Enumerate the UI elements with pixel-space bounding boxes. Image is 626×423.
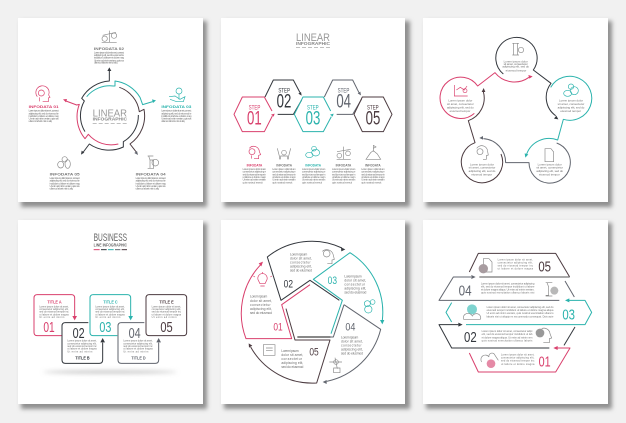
info column 2 (272, 148, 296, 185)
info column 1: Ut enim ad minim veniam (243, 179, 266, 182)
circle 4 dark: adipiscing elit, sed do (469, 169, 496, 173)
box 01: ut labore et dolore magna (39, 313, 69, 316)
box 01: 01 (43, 320, 55, 336)
title (296, 32, 331, 48)
icon: hand with coin (169, 88, 185, 102)
info column 1: Lorem ipsum dolor sit am (243, 168, 266, 171)
label: infodata 04: incididunt ut labore et dolore mag (136, 182, 166, 185)
circle 5 red: Lorem ipsum dolor (448, 99, 472, 103)
band 04: et dolore magna aliqua. Ut enim ad minim veniam, (481, 288, 535, 291)
circle 4 dark (461, 88, 503, 183)
band 04: quis nostrud exercitation ullamco laboris nisi (481, 291, 535, 294)
box 02: Lorem ipsum dolor sit amet, (67, 340, 97, 343)
label: infodata 02: INFODATA 02 (94, 46, 125, 51)
box 05: ut labore et dolore magna (152, 313, 182, 316)
box 05: 05 (160, 320, 173, 336)
segment 04: Lorem ipsum (341, 336, 359, 340)
circle 3 gray: adipiscing elit, sed do (536, 169, 563, 173)
segment 04: 04 (345, 322, 355, 334)
info column 3: quis nostrud exercit (302, 182, 322, 185)
hexagon 01: STEP (249, 106, 260, 112)
label: infodata 01: Lorem ipsum dolor sit amet, consect (29, 110, 59, 113)
segment 03: sed do eiusmod (344, 291, 366, 295)
info column 5: ut labore et dolore magn (361, 176, 385, 179)
box 01: Lorem ipsum dolor sit amet, (39, 305, 69, 308)
circle 2 teal: adipiscing elit, sed do (558, 105, 585, 109)
label: infodata 05: incididunt ut labore et dolore mag (50, 182, 80, 185)
hexagon 01 (234, 97, 275, 132)
circle 4 dark: eiusmod tempor (471, 172, 492, 176)
label: infodata 02: ullamco laboris nisi ut aliq (94, 62, 118, 65)
hexagon 03 (294, 97, 334, 132)
info column 4: ut labore et dolore magn (332, 176, 356, 179)
band 03: laboris nisi ut aliquip ex ea commodo consequat. Duis aute (487, 315, 554, 318)
centre title (93, 109, 128, 124)
box 01: consectetur adipiscing elit, (39, 308, 69, 311)
hexagon 05 (354, 97, 392, 132)
label: infodata 04: Ut enim ad minim veniam, quis nos (136, 185, 166, 188)
box 04: sed do eiusmod tempor inc (123, 345, 153, 348)
band 04: Lorem ipsum dolor sit amet, consectetur adipiscing (481, 282, 535, 285)
circle 2 teal: sit amet, consectetur (558, 102, 584, 106)
info column 3: sed do eiusmod tempor in (302, 173, 326, 176)
label: infodata 03: INFODATA 03 (161, 104, 192, 109)
band 05: 05 (538, 259, 551, 275)
circle 5 red: eiusmod tempor (450, 109, 470, 113)
hexagon 02 (265, 80, 302, 114)
label: infodata 02: adipiscing elit, sed do eiusmod te (94, 54, 125, 57)
box 03: consectetur adipiscing elit, (95, 308, 125, 311)
segment 05: dolor sit amet, (281, 353, 303, 357)
box 03: Lorem ipsum dolor sit amet, (95, 305, 125, 308)
circle 1 black: adipiscing elit, sed do (502, 65, 529, 69)
segment 05: 05 (309, 347, 319, 359)
band 01: sed do eiusmod tempor inc (501, 360, 535, 363)
circle 5 red (440, 73, 533, 118)
info column 4: sed do eiusmod tempor in (332, 173, 356, 176)
band 04: elit, sed do eiusmod tempor incididunt ut labore (481, 285, 535, 288)
info column 5: quis nostrud exercit (361, 182, 382, 185)
panel: hexagon steps (221, 18, 410, 207)
box 02 (62, 323, 105, 363)
circle 5 red: adipiscing elit, sed do (447, 105, 474, 109)
title: LINEAR (296, 32, 330, 44)
hexagon 03: 03 (306, 109, 320, 130)
label: infodata 02: incididunt ut labore et dolore mag (94, 57, 125, 60)
segment 01: Lorem ipsum (250, 295, 268, 299)
circle 2 teal: Lorem ipsum dolor (559, 99, 583, 103)
circle 2 teal (525, 76, 592, 158)
segment 03: consectetur (344, 283, 366, 287)
band 02: 02 (464, 330, 477, 346)
circular arrows (63, 67, 156, 155)
band 03: 03 (562, 307, 575, 323)
label: infodata 03: Lorem ipsum dolor sit amet, consect (161, 110, 192, 113)
label: infodata 01: incididunt ut labore et dolore mag (29, 115, 59, 118)
label: infodata 03: Ut enim ad minim veniam, quis nos (161, 118, 192, 121)
info column 3 (302, 146, 326, 185)
info column 2: sed do eiusmod tempor in (272, 173, 296, 176)
label: infodata 01: Ut enim ad minim veniam, quis nos (29, 118, 59, 121)
box 03 (90, 295, 133, 336)
box 03: Ut enim ad minim (95, 316, 120, 319)
band 05: consectetur adipiscing elit, (498, 262, 533, 265)
panel: pentagon pie (221, 220, 410, 409)
label: infodata 03: adipiscing elit, sed do eiusmod te (161, 112, 192, 115)
label: infodata 05: INFODATA 05 (50, 172, 81, 177)
box 02: consectetur adipiscing elit, (67, 342, 97, 345)
segment 04: adipiscing elit, (341, 348, 363, 352)
segment 03 (313, 253, 384, 334)
band 02: et dolore magna aliqua. Ut enim ad minim ven (482, 336, 533, 339)
info column 2: consectetur adipiscing e (272, 171, 296, 174)
label: infodata 05: Ut enim ad minim veniam, quis nos (50, 185, 80, 188)
info column 2: quis nostrud exercit (272, 182, 293, 185)
icon: bottle and cup (148, 156, 159, 168)
info column 5: Ut enim ad minim veniam (361, 179, 385, 182)
segment 01: adipiscing elit, (250, 307, 272, 311)
band 01: Lorem ipsum dolor sit amet, (501, 354, 535, 357)
info column 5: consectetur adipiscing e (361, 171, 385, 174)
box 02: 02 (73, 326, 85, 342)
info column 2: ut labore et dolore magn (272, 176, 296, 179)
box 04: consectetur adipiscing elit, (123, 342, 153, 345)
box 04 (118, 323, 161, 363)
label: infodata 05: adipiscing elit, sed do eiusmod te (50, 180, 80, 183)
segment 04: sed do eiusmod (341, 352, 363, 356)
hexagon 03: STEP (307, 106, 319, 112)
label: infodata 04: INFODATA 04 (136, 172, 167, 177)
box 05 (146, 295, 187, 336)
band 05 (469, 253, 570, 277)
box 05: sed do eiusmod tempor inc (152, 311, 182, 314)
centre title: LINEAR (93, 109, 127, 120)
segment 02: consectetur (290, 261, 312, 265)
segment 04 (297, 305, 381, 384)
segment 02 (267, 241, 345, 300)
band 03: eiusmod tempor incididunt ut labore et dolore magna aliqua (487, 309, 554, 312)
segment 04: dolor sit amet, (341, 340, 363, 344)
box 04: 04 (129, 326, 141, 342)
drop shadow (43, 370, 177, 374)
segment 05 (249, 309, 330, 383)
segment 03: adipiscing elit, (344, 287, 366, 291)
band 04: 04 (459, 283, 472, 299)
segment 03: dolor sit amet, (344, 279, 366, 283)
info column 4: consectetur adipiscing e (332, 171, 356, 174)
title: INFOGRAPHIC (296, 41, 331, 46)
segment 05: consectetur (281, 357, 303, 361)
label: infodata 05 (50, 172, 81, 190)
info column 3: Ut enim ad minim veniam (302, 179, 325, 182)
box 03: TITLE C (103, 299, 118, 305)
box 01: sed do eiusmod tempor inc (39, 311, 69, 314)
segment 01: 01 (273, 321, 283, 333)
circle 5 red: sit amet, consectetur (447, 102, 474, 106)
label: infodata 01 (29, 104, 60, 123)
info column 3: ut labore et dolore magn (302, 176, 326, 179)
segment 02: Lorem ipsum (290, 252, 308, 256)
band 03 (446, 298, 592, 325)
segment 02: adipiscing elit, (290, 265, 312, 269)
icon: figure with clouds (58, 157, 70, 168)
band 02: elit, sed do eiusmod tempor incididunt ut lab (482, 333, 533, 336)
info column 4: Ut enim ad minim veniam (332, 179, 355, 182)
segment 01 (241, 262, 310, 339)
info column 5: sed do eiusmod tempor in (361, 173, 385, 176)
circle 1 black (496, 37, 558, 119)
hexagon 04 (324, 80, 362, 114)
band 05: sed do eiusmod tempor inc (498, 265, 534, 268)
info column 2: INFODATA (276, 163, 292, 167)
label: infodata 04: ullamco laboris nisi ut aliq (136, 187, 160, 190)
box 01: Ut enim ad minim (39, 316, 64, 319)
band 01: consectetur adipiscing elit, (501, 357, 535, 360)
info column 3: Lorem ipsum dolor sit am (302, 168, 325, 171)
segment 05: adipiscing elit, (281, 361, 303, 365)
box 04: Ut enim ad minim (123, 350, 148, 353)
title: BUSINESS (94, 232, 127, 244)
label: infodata 04: adipiscing elit, sed do eiusmod te (136, 180, 166, 183)
label: infodata 01: INFODATA 01 (29, 104, 60, 109)
info column 1 (243, 146, 267, 185)
info column 4 (332, 147, 356, 185)
info column 3: INFODATA (305, 163, 321, 167)
box 03: ut labore et dolore magna (95, 313, 125, 316)
segment 02: 02 (284, 278, 293, 290)
title: LINE INFOGRAPHIC (94, 243, 127, 248)
label: infodata 02 (94, 46, 125, 65)
box 05: Lorem ipsum dolor sit amet, (152, 305, 181, 308)
info column 1: ut labore et dolore magn (243, 176, 267, 179)
label: infodata 05: Lorem ipsum dolor sit amet, consect (50, 177, 80, 180)
band 05: Lorem ipsum dolor sit amet, (498, 259, 533, 262)
label: infodata 02: Lorem ipsum dolor sit amet, consect (94, 51, 124, 54)
box 02: ut labore et dolore magna (67, 348, 97, 351)
segment 03: Lorem ipsum (344, 275, 362, 279)
title (94, 232, 127, 250)
box 02: sed do eiusmod tempor inc (67, 345, 97, 348)
circle 3 gray: Lorem ipsum dolor (538, 162, 562, 166)
info column 4: INFODATA (336, 163, 352, 167)
box 02: Ut enim ad minim (67, 350, 92, 353)
label: infodata 01: adipiscing elit, sed do eiusmod te (29, 112, 59, 115)
info column 1: quis nostrud exercit (243, 182, 263, 185)
band 05: ut labore et dolore magna (498, 268, 534, 271)
label: infodata 01: ullamco laboris nisi ut aliq (29, 120, 53, 123)
band 03: Ut enim ad minim veniam, quis nostrud exercitation ullamco (487, 312, 554, 315)
segment 01: dolor sit amet, (250, 299, 272, 303)
segment 01: consectetur (250, 303, 272, 307)
hexagon 02: 02 (277, 91, 291, 112)
circle 4 dark: Lorem ipsum dolor (470, 162, 494, 166)
panel: circular linear infographic (18, 18, 207, 207)
box 04: Lorem ipsum dolor sit amet, (123, 340, 153, 343)
circle 1 black: Lorem ipsum dolor (504, 59, 528, 63)
circle 3 gray: eiusmod tempor (539, 172, 560, 176)
label: infodata 03: ullamco laboris nisi ut aliq (161, 120, 185, 123)
hexagon 04: 04 (336, 91, 351, 112)
info column 2: Ut enim ad minim veniam (272, 179, 296, 182)
info column 1: INFODATA (247, 163, 263, 167)
segment 05: Lorem ipsum (281, 349, 299, 353)
band 01: 01 (539, 354, 551, 370)
circle 1 black: sit amet, consectetur (504, 62, 528, 66)
info column 5 (361, 145, 385, 185)
segment 03: 03 (328, 275, 337, 287)
box 01 (34, 295, 77, 336)
panel: linked circles (423, 18, 612, 207)
box 05: TITLE E (159, 299, 174, 305)
label: infodata 04: Lorem ipsum dolor sit amet, consect (136, 177, 166, 180)
panel: business squares (18, 220, 207, 409)
icon: head with gear (36, 86, 50, 102)
label: infodata 03: incididunt ut labore et dolore mag (161, 115, 192, 118)
segment 02: dolor sit amet, (290, 257, 312, 261)
circle 4 dark: sit amet, consectetur (469, 166, 495, 170)
label: infodata 05: ullamco laboris nisi ut aliq (50, 187, 74, 190)
centre title: INFOGRAPHIC (93, 117, 128, 122)
box 04: ut labore et dolore magna (123, 348, 153, 351)
info column 5: INFODATA (365, 163, 381, 167)
hexagon 05: STEP (367, 106, 379, 112)
info column 5: Lorem ipsum dolor sit am (361, 168, 385, 171)
circle 3 gray (479, 136, 570, 183)
hexagon 01: 01 (247, 109, 262, 130)
segment 05: sed do eiusmod (281, 365, 303, 369)
label: infodata 02: Ut enim ad minim veniam, quis nos (94, 59, 125, 62)
panel: stacked hexagon bands (423, 220, 612, 409)
segment 02: sed do eiusmod (290, 269, 312, 273)
info column 4: quis nostrud exercit (332, 182, 352, 185)
box 05: Ut enim ad minim (152, 316, 177, 319)
band 04 (439, 275, 574, 300)
box 01: TITLE A (47, 299, 62, 305)
icon: scales (102, 31, 117, 42)
circle 3 gray: sit amet, consectetur (536, 166, 563, 170)
band 03: Lorem ipsum dolor sit amet, consectetur adipiscing elit, sed do (487, 306, 554, 309)
info column 4: Lorem ipsum dolor sit am (332, 168, 355, 171)
hexagon 02: STEP (278, 88, 290, 94)
band 02: Lorem ipsum dolor sit amet, consectetur adipi (482, 330, 533, 333)
band 02: quis nostrud exercitation ullamco laboris (482, 340, 533, 343)
label: infodata 03 (161, 104, 192, 123)
segment 01: sed do eiusmod (250, 311, 272, 315)
box 02: TITLE B (75, 356, 90, 362)
info column 1: consectetur adipiscing e (243, 171, 267, 174)
label: infodata 04 (136, 172, 167, 190)
box 03: 03 (99, 320, 111, 336)
circle 1 black: eiusmod tempor (506, 69, 526, 73)
band 01: ut labore et dolore magna (501, 363, 535, 366)
box 05: consectetur adipiscing elit, (152, 308, 181, 311)
box 04: TITLE D (131, 356, 146, 362)
circle 2 teal: eiusmod tempor (560, 109, 581, 113)
hexagon 04: STEP (338, 88, 349, 94)
hexagon 05: 05 (366, 109, 380, 130)
segment 04: consectetur (341, 344, 363, 348)
info column 2: Lorem ipsum dolor sit am (272, 168, 296, 171)
band 02 (439, 323, 575, 348)
box 03: sed do eiusmod tempor inc (95, 311, 125, 314)
info column 3: consectetur adipiscing e (302, 171, 326, 174)
band 01 (469, 346, 570, 372)
info column 1: sed do eiusmod tempor in (243, 173, 267, 176)
